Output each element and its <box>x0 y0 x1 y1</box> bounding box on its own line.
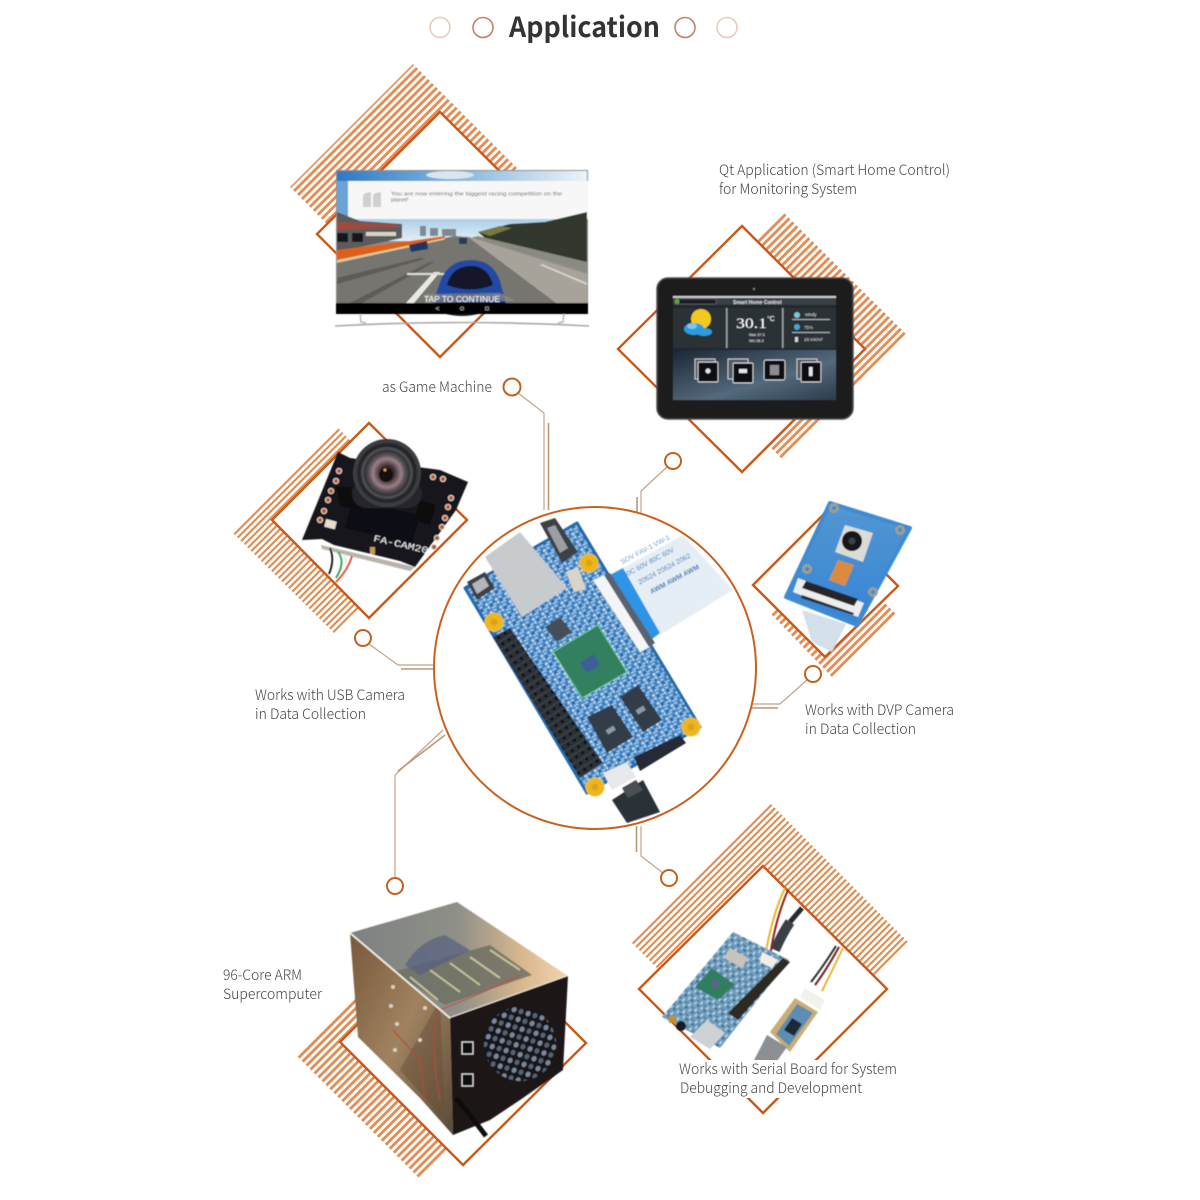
RAM chips <box>587 685 662 753</box>
camera label: FA-CAM20 <box>372 533 430 557</box>
stripes: game machine <box>290 64 517 291</box>
dialog box <box>348 181 588 219</box>
label mask behind serial text <box>675 1060 901 1098</box>
stripes: USB camera <box>233 428 438 634</box>
tablet header: Smart Home Control <box>733 300 782 306</box>
temperature: Min 28.3 <box>749 339 764 343</box>
label: Qt application: for Monitoring System <box>719 178 857 199</box>
label: serial board: Debugging and Development <box>680 1077 862 1098</box>
ribbon cable: AWM AWM AWM <box>649 564 701 596</box>
connector: supercomputer <box>395 730 445 878</box>
stripes: Qt tablet <box>661 212 907 460</box>
stripes: supercomputer <box>296 973 502 1179</box>
black front panel <box>450 976 568 1135</box>
title decoration: left circles <box>430 18 493 38</box>
fan grille <box>478 1001 562 1087</box>
USB host port <box>540 518 578 563</box>
dialog text: You are now entering the biggest racing competition on the <box>391 192 562 198</box>
temperature: 30.1 <box>736 316 767 332</box>
title decoration: right circles <box>675 18 737 38</box>
ribbon cable: 20624 20624 2062 <box>637 553 692 586</box>
diamond: serial board <box>639 866 887 1113</box>
camera wires <box>329 548 352 582</box>
FPC connector <box>793 578 864 617</box>
USB serial adapter <box>770 998 818 1052</box>
tap to continue label <box>424 293 516 304</box>
micro USB bottom <box>603 762 636 790</box>
title text: Application <box>508 6 660 46</box>
temperature: °C <box>767 315 775 323</box>
ribbon cable: SOV FAV-1 VW-1 <box>620 534 671 566</box>
photo: USB camera module <box>302 439 468 582</box>
label: serial board: Works with Serial Board for System <box>679 1058 897 1079</box>
diamond: game machine <box>317 112 563 357</box>
label: DVP camera <box>805 699 954 739</box>
temperature: Max 37.3 <box>749 333 765 337</box>
label: Qt application: Qt Application (Smart Home Control) <box>719 159 950 180</box>
diamond: DVP camera <box>753 513 898 657</box>
photo: 96-core supercomputer <box>350 902 568 1136</box>
connector: serial board <box>636 826 663 873</box>
left acrylic face <box>350 933 453 1135</box>
stripes: DVP camera <box>770 552 897 678</box>
ribbon cable <box>610 529 733 642</box>
label: supercomputer: Supercomputer <box>223 983 323 1004</box>
connector lines <box>355 378 821 894</box>
top acrylic face <box>350 902 568 1018</box>
quote mark <box>363 192 381 207</box>
circuit board <box>465 523 700 793</box>
tablet header <box>673 298 836 306</box>
label: DVP camera: Works with DVP Camera <box>805 699 954 720</box>
network ports <box>462 1042 473 1086</box>
label: USB camera: in Data Collection <box>255 703 366 724</box>
tap to continue label: TAP TO CONTINUE <box>424 295 500 304</box>
micro USB cable <box>790 908 802 922</box>
label: game machine: as Game Machine <box>382 376 492 397</box>
temperature <box>736 315 775 343</box>
diamond: USB camera <box>272 423 467 618</box>
internal wiring <box>393 1010 440 1100</box>
node circles <box>355 378 821 894</box>
home control buttons <box>695 359 821 383</box>
diamond: supercomputer <box>340 920 586 1165</box>
photo: serial debug boards <box>662 888 843 1068</box>
HDMI connector <box>634 735 686 771</box>
serial wires <box>765 888 843 991</box>
dialog text <box>391 192 562 204</box>
camera sensor <box>835 525 873 562</box>
label: USB camera: Works with USB Camera <box>255 684 405 705</box>
race car <box>433 260 506 303</box>
label: Qt application <box>719 159 950 199</box>
photo: DVP camera module <box>786 503 910 652</box>
photo: Qt smart home tablet <box>657 278 853 419</box>
dialog text: planet! <box>391 198 409 204</box>
outlined diamonds <box>272 112 898 1165</box>
title <box>430 6 737 46</box>
connector: DVP camera <box>752 680 807 708</box>
power plug <box>612 780 660 823</box>
pin header <box>493 628 603 778</box>
lens holder <box>345 500 420 545</box>
camera label <box>324 519 430 557</box>
label: USB camera <box>255 684 405 724</box>
flex cable <box>829 560 854 586</box>
weather readouts <box>792 312 830 342</box>
photo: TV racing game <box>335 170 589 326</box>
micro USB left <box>467 572 495 600</box>
weather readouts: windy <box>805 312 817 317</box>
striped backdrops <box>233 64 908 1179</box>
stripes: serial board <box>631 803 908 1081</box>
mounting holes <box>485 554 700 796</box>
ribbon cable <box>802 610 846 652</box>
FPC socket <box>593 573 655 652</box>
mounting holes <box>804 504 904 596</box>
label: supercomputer <box>223 964 323 1004</box>
diamond: Qt tablet <box>618 226 865 472</box>
weather readouts: 18 mk/m² <box>804 337 823 342</box>
weather readouts: 75% <box>804 325 813 330</box>
copper pads <box>317 468 454 550</box>
label: DVP camera: in Data Collection <box>805 718 916 739</box>
weather icon <box>684 309 712 336</box>
label: serial board <box>679 1058 897 1098</box>
visible boards <box>393 935 532 1010</box>
TV stand <box>335 314 589 326</box>
power cable <box>456 1098 486 1136</box>
connector: USB camera <box>369 644 434 669</box>
main circle with NanoPi board <box>434 507 756 829</box>
slide switch <box>566 567 586 592</box>
Ethernet controller <box>545 617 572 642</box>
main board <box>662 932 789 1048</box>
ribbon cable: 80C 60V 80C 60V <box>622 547 676 580</box>
ethernet jack <box>485 532 567 617</box>
connector: tablet <box>637 467 667 514</box>
SoC chip <box>553 625 627 698</box>
connector: game machine <box>518 393 548 510</box>
camera lens <box>352 439 422 508</box>
label: supercomputer: 96-Core ARM <box>223 964 302 985</box>
